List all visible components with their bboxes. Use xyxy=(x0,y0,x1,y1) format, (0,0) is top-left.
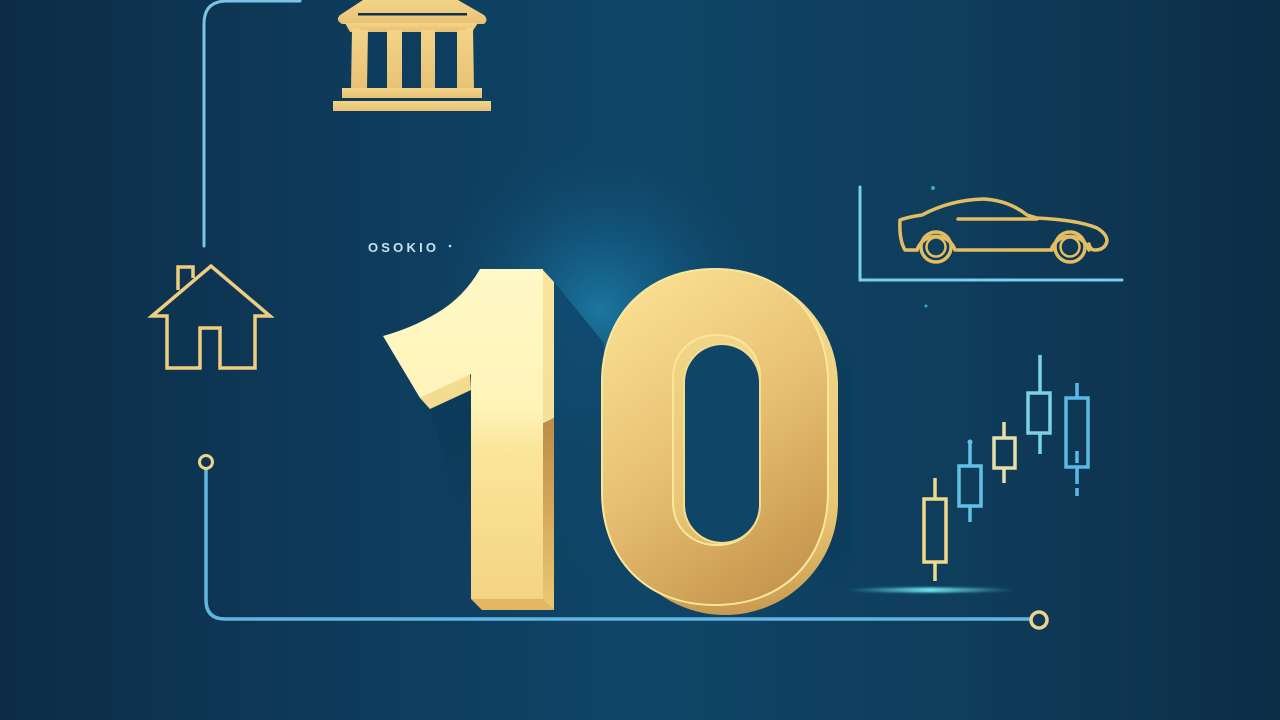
front face xyxy=(383,269,543,599)
connector line: top left xyxy=(204,1,300,246)
counter hole xyxy=(685,345,759,542)
counter rim xyxy=(684,344,760,543)
candlestick chart xyxy=(924,355,1088,581)
extruded side xyxy=(612,272,838,615)
candle 4 xyxy=(1028,355,1050,454)
icon: car on axes xyxy=(860,186,1122,308)
candle 5 xyxy=(1066,383,1088,496)
candle 2 xyxy=(959,440,981,522)
sparkle dots xyxy=(924,186,935,308)
front face with counter xyxy=(602,269,828,605)
small label: OSOKIO xyxy=(368,240,439,255)
candle 1 xyxy=(924,478,946,581)
chart axes xyxy=(860,187,1122,280)
shadow of the number xyxy=(430,282,846,610)
icon: house xyxy=(152,266,270,368)
numeral 1 xyxy=(383,269,554,610)
floor glow xyxy=(845,588,1015,592)
candle 3 xyxy=(994,422,1015,483)
car outline xyxy=(900,199,1107,262)
connector line: bottom with end nodes xyxy=(200,456,1047,628)
numeral 0 xyxy=(602,269,838,615)
side bevel xyxy=(542,269,554,424)
icon: bank xyxy=(333,0,491,111)
lower bevel xyxy=(471,599,554,610)
